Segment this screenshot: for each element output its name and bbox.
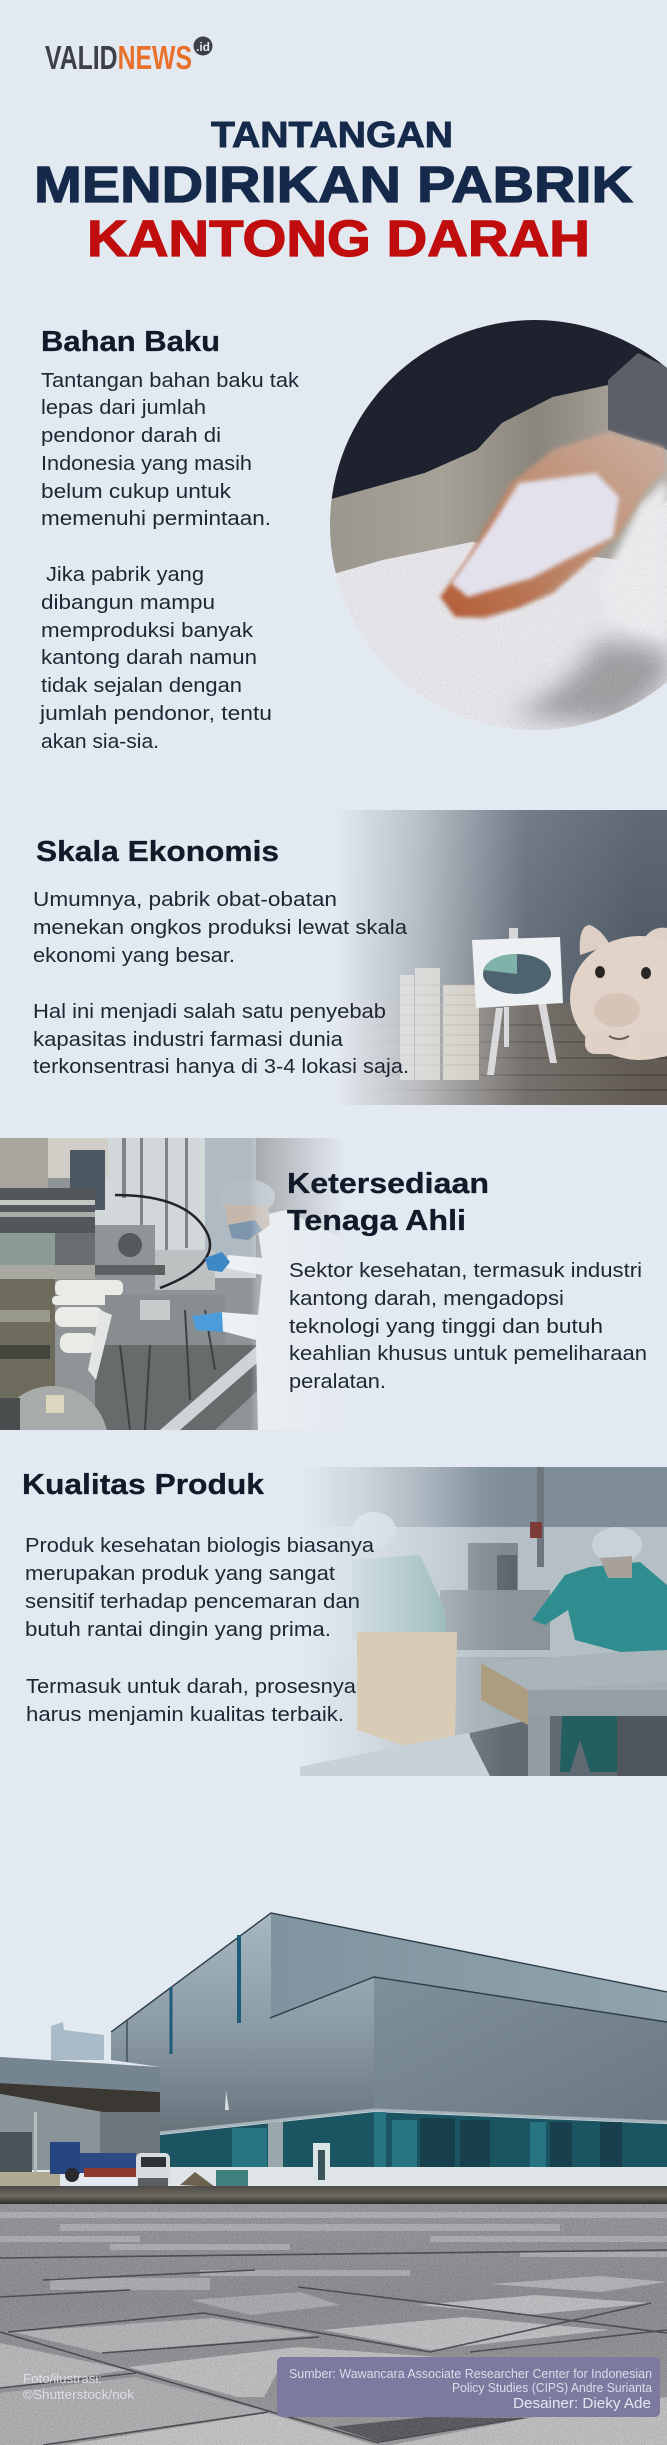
heading: ketersediaan tenaga ahli	[287, 1168, 489, 1237]
photo: piggy bank, chart easel and coins	[336, 810, 667, 1105]
panel: ketersediaan tenaga ahli	[0, 1138, 646, 1430]
photo: hand holding plastic pellets	[320, 320, 667, 740]
text block: bahan baku: belum cukup untuk	[41, 481, 232, 503]
text block: skala ekonomis	[33, 889, 409, 1078]
text block: bahan baku: dibangun mampu	[41, 592, 215, 614]
cardboard box	[357, 1632, 457, 1745]
text block: ketersediaan tenaga ahli: keahlian khusus untuk pemeliharaan	[289, 1343, 647, 1365]
text block: skala ekonomis: Hal ini menjadi salah satu penyebab	[33, 1001, 386, 1023]
road strip	[0, 2186, 667, 2204]
title: TANTANGAN	[211, 114, 453, 155]
photo credit: ©Shutterstock/nok	[23, 2387, 135, 2402]
heading: skala ekonomis: Skala Ekonomis	[36, 836, 279, 868]
heading: ketersediaan tenaga ahli: Tenaga Ahli	[287, 1205, 466, 1237]
text block: bahan baku: Indonesia yang masih	[41, 453, 252, 475]
text block: bahan baku: memenuhi permintaan.	[41, 508, 271, 530]
text block: bahan baku: pendonor darah di	[41, 425, 221, 447]
icon: coin stacks	[400, 968, 479, 1080]
pavement	[0, 2204, 667, 2445]
truck	[0, 2142, 136, 2186]
text block: bahan baku: memproduksi banyak	[41, 620, 254, 642]
text block: kualitas produk: butuh rantai dingin yang prima.	[25, 1619, 331, 1641]
text block: bahan baku: kantong darah namun	[41, 647, 257, 669]
logo: Validnews.id: VALIDNEWS	[45, 39, 192, 76]
panel: skala ekonomis	[33, 810, 667, 1105]
text block: ketersediaan tenaga ahli: Sektor kesehatan, termasuk industri	[289, 1260, 642, 1282]
source box: Desainer: Dieky Ade	[513, 2396, 651, 2412]
text block: skala ekonomis: ekonomi yang besar.	[33, 945, 235, 967]
text block: bahan baku: Tantangan bahan baku tak	[41, 370, 300, 392]
text block: kualitas produk: harus menjamin kualitas terbaik.	[26, 1704, 344, 1726]
photo credit	[23, 2371, 135, 2402]
text block: kualitas produk: Produk kesehatan biologis biasanya	[25, 1535, 375, 1557]
text block: skala ekonomis: Umumnya, pabrik obat-obatan	[33, 889, 337, 911]
heading: ketersediaan tenaga ahli: Ketersediaan	[287, 1168, 489, 1200]
text block: ketersediaan tenaga ahli: kantong darah, mengadopsi	[289, 1288, 564, 1310]
source box: Policy Studies (CIPS) Andre Surianta	[452, 2381, 652, 2395]
source box: Sumber: Wawancara Associate Researcher Center for Indonesian	[289, 2367, 652, 2381]
text block: ketersediaan tenaga ahli: teknologi yang tinggi dan butuh	[289, 1316, 603, 1338]
text block: bahan baku: Jika pabrik yang	[46, 564, 204, 586]
van	[136, 2153, 170, 2186]
text block: bahan baku: jumlah pendonor, tentu	[39, 703, 272, 725]
text block: skala ekonomis: terkonsentrasi hanya di 3-4 lokasi saja.	[33, 1056, 409, 1078]
text block: bahan baku: tidak sejalan dengan	[41, 675, 242, 697]
text block: skala ekonomis: kapasitas industri farmasi dunia	[33, 1029, 344, 1051]
heading: kualitas produk: Kualitas Produk	[22, 1469, 265, 1501]
icon: piggy bank	[570, 925, 667, 1060]
photo: technician operating machine	[0, 1138, 334, 1430]
text block: kualitas produk	[25, 1535, 375, 1726]
text block: kualitas produk: Termasuk untuk darah, prosesnya	[26, 1676, 357, 1698]
text block: ketersediaan tenaga ahli: peralatan.	[289, 1371, 386, 1393]
worker in teal uniform	[532, 1527, 667, 1772]
photo: workers in cleanroom	[298, 1467, 667, 1776]
text block: bahan baku	[39, 370, 300, 753]
door	[313, 2143, 330, 2185]
text block: kualitas produk: sensitif terhadap pencemaran dan	[25, 1591, 360, 1613]
text block: bahan baku: lepas dari jumlah	[41, 397, 206, 419]
title: KANTONG DARAH	[87, 210, 590, 267]
title: MENDIRIKAN PABRIK	[34, 156, 633, 213]
ghost worker	[352, 1512, 447, 1640]
logo: Validnews.id: .id	[196, 40, 210, 54]
text block: bahan baku: akan sia-sia.	[41, 731, 159, 753]
icon: chart easel	[472, 928, 563, 1075]
photo credit: Foto/ilustrasi:	[23, 2371, 102, 2386]
bench	[298, 1733, 490, 1776]
panel: bahan baku	[39, 320, 667, 753]
text block: kualitas produk: merupakan produk yang sangat	[25, 1563, 335, 1585]
title	[34, 114, 633, 267]
text block: skala ekonomis: menekan ongkos produksi lewat skala	[33, 917, 408, 939]
photo: factory building	[0, 1913, 667, 2187]
source box	[277, 2357, 660, 2417]
text block: ketersediaan tenaga ahli	[289, 1260, 647, 1393]
heading: bahan baku: Bahan Baku	[41, 326, 220, 358]
panel: kualitas produk	[22, 1467, 667, 1776]
technician	[192, 1179, 345, 1430]
steel table	[481, 1648, 667, 1776]
